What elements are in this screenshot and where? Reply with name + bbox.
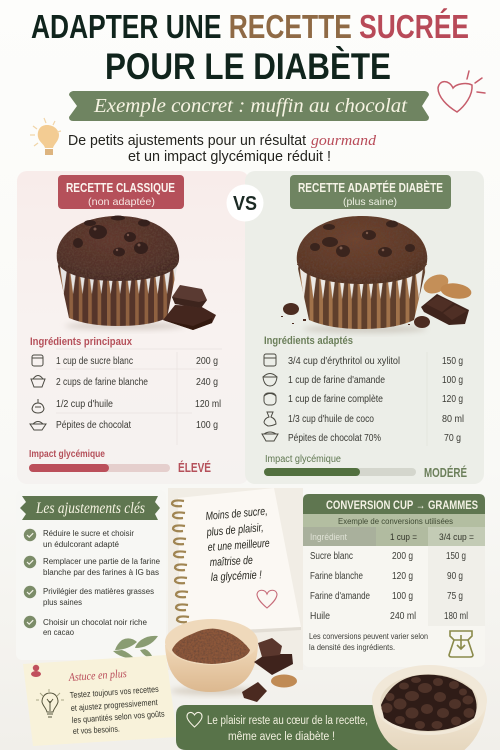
- icon: kitchen scale: [449, 631, 473, 657]
- tip text: et ajustez progressivement: [70, 697, 158, 713]
- almond: [271, 674, 297, 688]
- adjustment list: Remplacer une partie de la farine: [43, 556, 160, 566]
- ingredient rows: 70 g: [444, 433, 461, 444]
- table subtitle: [303, 514, 485, 527]
- icon: red pin: [31, 665, 41, 677]
- intro text: gourmand: [311, 133, 377, 149]
- chocolate chips: [382, 677, 474, 729]
- title: [31, 8, 469, 87]
- panel: classic recipe: [17, 171, 249, 484]
- illustration: adapted muffin: [281, 216, 472, 333]
- ingredient rows: 80 ml: [442, 414, 464, 425]
- glycemic impact: high: Impact glycémique: [29, 449, 105, 460]
- badge: adapted recipe: (plus saine): [343, 196, 397, 208]
- adjustment list: Choisir un chocolat noir riche: [43, 617, 147, 627]
- badge: adapted recipe: [290, 175, 451, 209]
- tip text: et vos besoins.: [73, 724, 120, 736]
- VS badge: [226, 184, 264, 222]
- ingredient rows: 120 ml: [195, 399, 221, 410]
- column headers: 1 cup =: [390, 532, 417, 543]
- table rows: 180 ml: [444, 611, 468, 622]
- badge: classic recipe: (non adaptée): [88, 196, 155, 208]
- adjustment list: Privilégier des matières grasses: [43, 586, 154, 596]
- icon: tip bulb: [36, 689, 64, 717]
- table: cup to grams conversion: [303, 494, 485, 667]
- table rows: Huile: [310, 611, 330, 622]
- notebook note: Moins de sucre,: [205, 506, 268, 523]
- glycemic impact: high: ÉLEVÉ: [178, 460, 211, 475]
- table rows: Farine blanche: [310, 571, 363, 582]
- adjustment list: Réduire le sucre et choisir: [43, 528, 134, 538]
- ingredients heading: Ingrédients adaptés: [264, 335, 353, 347]
- notebook note: maîtrise de: [210, 555, 253, 569]
- table rows: 240 ml: [390, 611, 416, 622]
- table title: [303, 494, 485, 514]
- ingredient rows: 1 cup de farine complète: [288, 394, 383, 405]
- ingredient rows: 1/2 cup d'huile: [56, 399, 113, 410]
- ingredient rows: 100 g: [196, 420, 218, 431]
- ingredient rows: 3/4 cup d'érythritol ou xylitol: [288, 356, 400, 367]
- icon: light bulb: [30, 118, 61, 155]
- table note: [309, 632, 428, 652]
- chocolate piece: [242, 682, 267, 702]
- subtitle ribbon: Exemple concret : muffin au chocolat: [93, 95, 407, 117]
- icon: banner heart: [187, 712, 202, 727]
- check icons: [24, 529, 36, 628]
- notebook spiral: [172, 500, 189, 622]
- column headers: 3/4 cup =: [439, 532, 474, 543]
- ingredient icons: [30, 355, 46, 430]
- tip text: Testez toujours vos recettes: [69, 684, 159, 700]
- icon: notebook heart: [257, 590, 277, 608]
- ingredient rows: 1 cup de sucre blanc: [56, 356, 133, 367]
- tip text: [69, 684, 165, 736]
- ingredient rows: Pépites de chocolat 70%: [288, 433, 381, 444]
- table note: Les conversions peuvent varier selon: [309, 632, 428, 641]
- chocolate pieces: [163, 285, 216, 330]
- notebook note: plus de plaisir,: [205, 522, 264, 539]
- ingredient rows: 1 cup de farine d'amande: [288, 375, 385, 386]
- ingredient rows: 120 g: [442, 394, 463, 405]
- notebook note: [205, 506, 270, 584]
- table column shade: [428, 546, 485, 626]
- table rows: 150 g: [446, 551, 466, 562]
- table rows: 90 g: [447, 571, 463, 582]
- ingredient rows: [56, 356, 221, 431]
- intro text: De petits ajustements pour un résultat: [68, 133, 306, 149]
- table divider: [426, 352, 428, 446]
- badge: adapted recipe: RECETTE ADAPTÉE DIABÈTE: [298, 180, 443, 195]
- column headers: Ingrédient: [310, 532, 347, 543]
- glycemic impact: moderate: MODÉRÉ: [424, 465, 467, 480]
- ingredient rows: 1/3 cup d'huile de coco: [288, 414, 374, 425]
- adjustment list: blanche par des farines à IG bas: [43, 567, 159, 577]
- table rows: 120 g: [392, 571, 413, 582]
- table rows: 200 g: [392, 551, 413, 562]
- table dividers: [56, 349, 222, 445]
- glycemic impact: moderate: [264, 454, 467, 480]
- chocolate stack: [254, 638, 293, 675]
- title: POUR LE DIABÈTE: [105, 46, 391, 87]
- glycemic impact: moderate: Impact glycémique: [265, 454, 341, 465]
- chocolate square: [421, 294, 469, 325]
- ingredients heading: Ingrédients principaux: [30, 336, 133, 348]
- intro text: et un impact glycémique réduit !: [128, 149, 331, 165]
- ingredient rows: 200 g: [196, 356, 218, 367]
- VS badge: VS: [233, 193, 257, 215]
- ingredient rows: 100 g: [442, 375, 463, 386]
- almonds: [421, 271, 472, 301]
- notebook: [168, 488, 303, 670]
- glycemic impact: high: [29, 449, 211, 475]
- table rows: [310, 551, 468, 622]
- badge: classic recipe: [58, 175, 184, 209]
- icon: heart with rays: [438, 71, 485, 112]
- intro text: [68, 133, 377, 165]
- ribbon heading: Les ajustements clés: [35, 500, 145, 517]
- ingredient rows: Pépites de chocolat: [56, 420, 131, 431]
- column headers: [303, 527, 485, 546]
- ingredient rows: 240 g: [196, 377, 218, 388]
- table rows: 75 g: [447, 591, 463, 602]
- panel: key adjustments: [16, 490, 166, 660]
- tip heading: Astuce en plus: [68, 668, 128, 684]
- ingredient icons: [262, 354, 278, 441]
- adjustment list: en cacao: [43, 627, 74, 637]
- illustration: classic muffin: [57, 216, 216, 330]
- table rows: 100 g: [392, 591, 413, 602]
- icon: leaves: [113, 636, 158, 659]
- ingredient rows: 150 g: [442, 356, 463, 367]
- title: ADAPTER UNE RECETTE SUCRÉE: [31, 8, 469, 45]
- table rows: Farine d'amande: [310, 591, 370, 602]
- adjustment list: [43, 528, 160, 637]
- ingredient rows: [288, 356, 464, 444]
- badge: classic recipe: RECETTE CLASSIQUE: [66, 180, 175, 195]
- adjustment list: un édulcorant adapté: [43, 539, 119, 549]
- banner text: Le plaisir reste au cœur de la recette,: [207, 715, 368, 727]
- notebook note: la glycémie !: [211, 569, 263, 584]
- banner text: même avec le diabète !: [228, 731, 335, 743]
- subtitle ribbon: [69, 91, 429, 121]
- banner text: [207, 715, 368, 743]
- green closing banner: [176, 705, 400, 750]
- table rows: Sucre blanc: [310, 551, 353, 562]
- chocolate chips: [281, 303, 430, 328]
- panel: adapted recipe: [245, 171, 484, 484]
- ribbon heading: [20, 496, 160, 520]
- illustration: chocolate chip bowl: [372, 665, 487, 750]
- table subtitle: Exemple de conversions utilisées: [338, 516, 453, 526]
- tip text: les quantités selon vos goûts: [71, 709, 165, 725]
- adjustment list: plus saines: [43, 597, 82, 607]
- notebook note: et une meilleure: [207, 538, 270, 554]
- table note: la densité des ingrédients.: [309, 643, 395, 652]
- ingredient rows: 2 cups de farine blanche: [56, 377, 148, 388]
- tip card: [23, 655, 177, 746]
- illustration: cocoa bowl and chocolate: [165, 619, 297, 702]
